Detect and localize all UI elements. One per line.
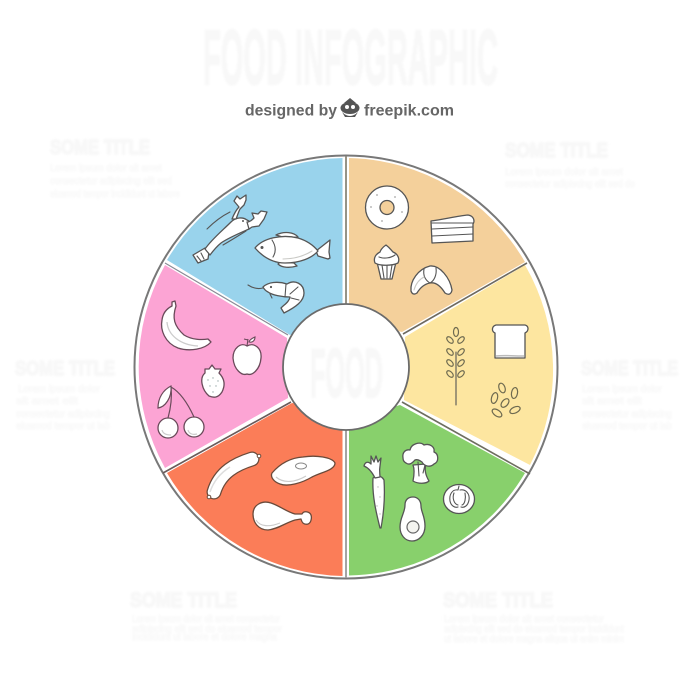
outer ring (134, 156, 558, 578)
icon: bread slice (492, 325, 528, 358)
icon: cake slice (431, 215, 474, 243)
label: middle right: eiusmod tempor ut lab (582, 421, 672, 432)
icon: carrot (364, 456, 384, 528)
label: bottom right: Lorem ipsum dolor sit amet consectetur (444, 614, 605, 625)
credit text right: freepik.com (364, 102, 454, 120)
label: bottom right: adipiscing elit sed do eiusmod tempor incididunt (444, 624, 624, 635)
wheel chart: FOOD (310, 334, 383, 412)
label: bottom left: adipiscing elit sed do eiusmod tempor (132, 624, 283, 635)
label: top right (505, 140, 635, 190)
label: bottom right (443, 589, 624, 645)
label: middle right: Lorem ipsum dolor (582, 384, 663, 395)
icon: fish (255, 233, 330, 267)
spokes (163, 156, 530, 578)
label: middle left: sit amet elit (16, 396, 78, 407)
icon: wheat (446, 328, 465, 405)
label: middle left: Lorem ipsum dolor (18, 384, 101, 395)
icon: cherries (158, 386, 204, 438)
segment: fruit (139, 265, 288, 468)
label: top right: consectetur adipiscing elit sed do (505, 179, 635, 190)
label: top right: Lorem ipsum dolor sit amet (505, 167, 623, 178)
label: top left: eiusmod tempor incididunt ut labore (50, 189, 180, 200)
icon: freepik logo (340, 98, 360, 117)
segment: grains (404, 265, 553, 465)
segment: meat (167, 403, 342, 576)
label: bottom left (130, 589, 283, 643)
label: middle right: SOME TITLE (581, 358, 678, 380)
credit line (245, 98, 454, 120)
segment: vegetables (349, 405, 525, 576)
label: top left (50, 137, 180, 200)
label: top right: SOME TITLE (505, 140, 608, 162)
icon: steak (271, 456, 335, 485)
label: bottom left: SOME TITLE (130, 589, 237, 612)
label: middle left: SOME TITLE (15, 358, 115, 380)
icon: grains (490, 382, 521, 419)
icon: donut (366, 186, 408, 229)
icon: apple (233, 337, 261, 374)
segment: bakery (349, 158, 525, 332)
icon: broccoli (403, 443, 438, 483)
icon: strawberry (202, 365, 224, 397)
segment: seafood (167, 158, 342, 335)
center circle (283, 304, 409, 430)
label: bottom right: ut labore et dolore magna aliqua ut enim minim (444, 634, 624, 645)
icon: sausage (207, 454, 261, 499)
icon: shrimp (248, 282, 304, 313)
label: bottom left: Lorem ipsum dolor sit amet consectetur (132, 614, 281, 625)
label: middle left: eiusmod tempor ut lab (16, 421, 110, 432)
label: middle left: consectetur adipiscing (16, 409, 110, 420)
label: middle right: sit amet elit (582, 396, 642, 407)
label: top left: Lorem ipsum dolor sit amet (50, 163, 162, 174)
icon: cupcake (374, 245, 399, 279)
icon: croissant (411, 266, 452, 294)
label: bottom left: incididunt ut labore et dolore magna (132, 632, 277, 643)
icon: lobster (193, 195, 267, 263)
icon: avocado (400, 497, 425, 541)
label: middle right: consectetur adipiscing (582, 409, 672, 420)
label: middle right (581, 358, 678, 432)
credit text left: designed by (245, 102, 337, 120)
label: bottom right: SOME TITLE (443, 589, 553, 612)
label: middle left (15, 358, 115, 432)
label: top left: SOME TITLE (50, 137, 150, 159)
label: top left: consectetur adipiscing elit sed (50, 176, 172, 187)
icon: tomato (444, 484, 474, 514)
icon: banana (162, 301, 211, 350)
icon: chicken drumstick (253, 502, 311, 530)
wheel chart (134, 156, 558, 578)
